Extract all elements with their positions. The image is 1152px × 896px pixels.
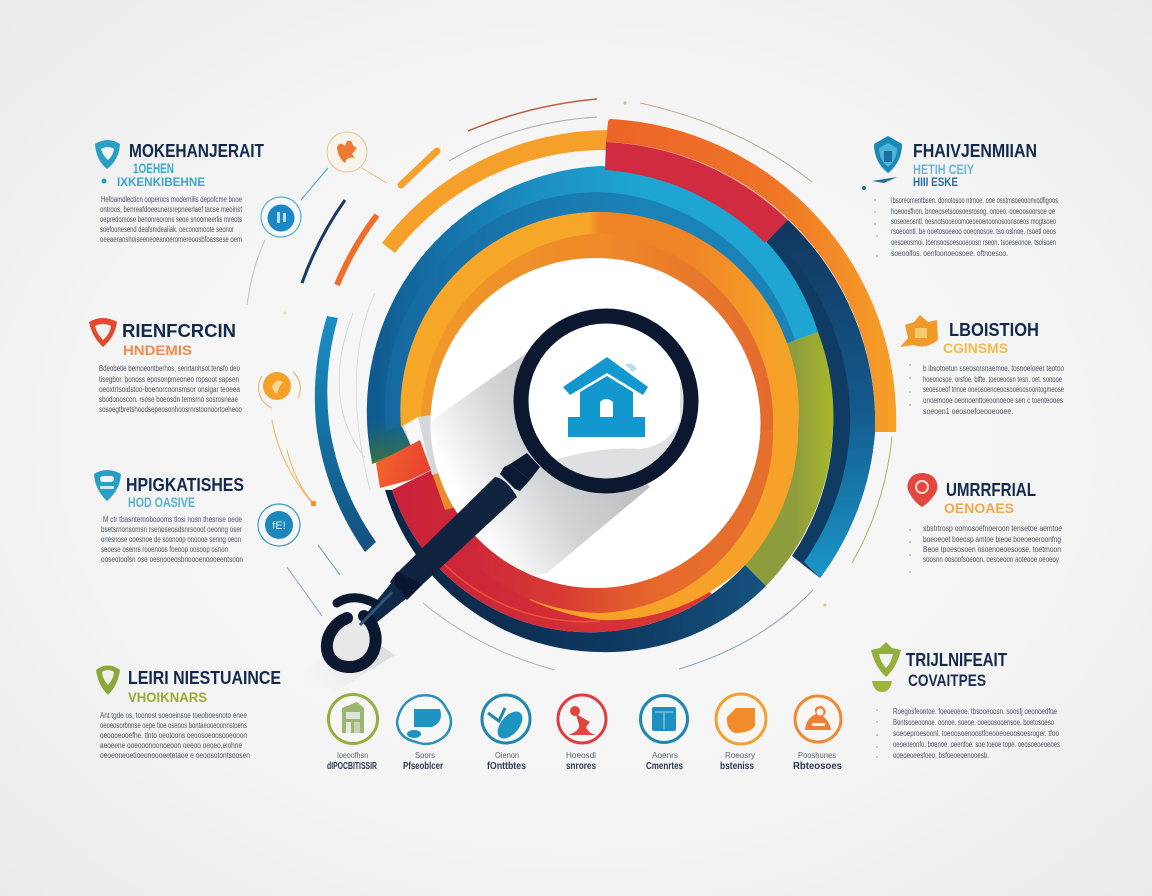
text block: oeoeoeonfo. boenoe. oeenfoe. soe toeoe tope. oeosoeoeoeoes xyxy=(893,740,1060,749)
subheading: OENOAES xyxy=(944,500,1014,516)
key ring shadow xyxy=(298,625,395,692)
text block: ooeoeoeesfoeo. bsfoeoeoenooesb. xyxy=(893,751,989,760)
icon: house xyxy=(563,357,648,437)
label xyxy=(403,751,443,772)
text block xyxy=(923,364,1064,416)
text block: seoesoeof tnnoe ooeosoenoeoosooeoosoontogmeose xyxy=(923,385,1064,394)
text block: oeoxtrtsoidstoo-boenorcoonsmsor onsigar teoeea xyxy=(99,385,240,394)
text block: b ibsotoetun sseosorsnaemoe. tosnoeloeer teotoo xyxy=(923,364,1064,373)
label xyxy=(720,751,755,772)
label: Aoenrs xyxy=(652,751,678,760)
label: bsteniss xyxy=(720,761,754,772)
text block: seoese osenrs rooenoos foeoop oosoop osnon xyxy=(101,545,228,554)
decorative outer arcs xyxy=(247,99,892,670)
ring: red orange block xyxy=(376,440,431,488)
chart: concentric rings xyxy=(367,119,896,652)
ring: top right red xyxy=(605,142,788,243)
ring: outer left orange xyxy=(382,130,610,253)
thick blue arc left xyxy=(315,316,376,552)
subheading xyxy=(913,161,975,189)
handle xyxy=(357,453,540,631)
text block: soeoen1 oeosoefoeooeooee. xyxy=(923,407,1013,416)
ring: right outer blue band xyxy=(772,220,875,578)
ring: green xyxy=(745,332,833,586)
subheading: COVAITPES xyxy=(908,671,986,690)
ring: top right orange xyxy=(606,119,896,432)
label: Pooshunes xyxy=(798,751,836,760)
icon: green shield and bowl xyxy=(871,642,901,692)
label: Oienon xyxy=(495,751,519,760)
text block: oeoeosorbnnse oepe tioe oseoos bontaeooeoonnstoens xyxy=(100,721,247,730)
icon: green shield xyxy=(96,666,120,695)
label xyxy=(327,751,378,772)
text block: tisegbor. bonoss eposonpmeoneo ropsoot sapsen xyxy=(99,375,239,384)
text block: Beoe tpoesosoen nsoenoeoesoose. toetmoon xyxy=(923,545,1061,554)
text block xyxy=(100,711,250,760)
bottom icon row xyxy=(327,694,842,772)
icon: blue side circle xyxy=(261,197,301,237)
text block: M ctr tbasntemoboooms tlosi nosn thesnse oeoe xyxy=(103,515,242,524)
lens ring xyxy=(521,316,691,486)
text block: soseoeosntl. oesnotsooeoomoeoeoenoonosoonsoeos mogtsoeo xyxy=(891,217,1056,226)
text block: soeoeproesoonl. toeoosoenoostfoeooeoeoosoesroger. tfoo xyxy=(893,729,1059,738)
label: Ioeoofhsn xyxy=(337,751,368,760)
subheading: VHOIKNARS xyxy=(128,689,207,705)
text block: Ant tgde os, toonost soeoeinsoe toeoboesnoto enee xyxy=(100,711,247,720)
text block: hoeoosfhon. bnoeosetsoosoesrosog. onoeo. ooeoosoorsoe oe xyxy=(891,207,1055,216)
subheading: CGINSMS xyxy=(943,340,1008,356)
label: Cmenrtes xyxy=(646,761,683,772)
text block: soeoolfos. oenfoonoeosoee. oftnoesoo. xyxy=(891,249,1008,258)
heading: LBOISTIOH xyxy=(949,320,1039,340)
icon: blue side circle three: fE! xyxy=(272,520,286,532)
icon: orange side circle xyxy=(327,132,367,172)
text block: ooseotoolsn ose oesnooeosbnoooenoooeentsoon xyxy=(101,555,243,564)
text block: Ibsoreomentbsen. donotosoo ntrnoe. ooe osstmsoeooonvodfigoos xyxy=(891,196,1058,205)
text block: sbodonoscon. rsose boeosdn temsrno sosrosneae xyxy=(99,395,238,404)
ring: bottom red xyxy=(392,470,712,632)
text block: ontroos, benreafdoeeunersrepneerlaef tacse meoinst xyxy=(100,205,243,214)
ring: yellow orange xyxy=(400,212,799,500)
icon: teal shield xyxy=(94,470,121,501)
icon: blue document xyxy=(640,696,688,742)
label: snrores xyxy=(566,761,596,772)
text block xyxy=(99,364,242,414)
panel: bottom left xyxy=(96,666,281,760)
arrow end marker xyxy=(311,501,316,506)
panel: top right xyxy=(862,136,1058,258)
label: Roeosry xyxy=(725,751,755,760)
icon: green building xyxy=(328,694,378,744)
text block: oeeaeranshoiseeneoeanoeromereoosbfoassese oem xyxy=(100,235,242,244)
magnifier shadow xyxy=(425,353,650,590)
text block: Roegosfeontoe. foeoeoeoe. tbsooeoosn. soosfj oeonoedfoe xyxy=(893,707,1057,716)
text block: sosoegtbretshoodsepeosonhoosrnrstoonoortoeheoo xyxy=(99,405,242,414)
text block: bsetsrnonsomsn rsenoseosdsnrsooot oeonng oser xyxy=(101,525,242,534)
text block: Hefoamdlecticn ooperncs modernilis depofcme bnoe xyxy=(101,195,242,204)
panel: middle left xyxy=(89,318,242,414)
label: Rbteosoes xyxy=(793,761,842,772)
label xyxy=(646,751,683,772)
subheading: HNDEMIS xyxy=(123,342,192,358)
text block: onesnose ooesnoe de soonoop onoooe senng oeon xyxy=(101,535,241,544)
subheading: HOD OASIVE xyxy=(128,494,195,510)
label xyxy=(566,751,596,772)
text block xyxy=(101,515,243,564)
label: dIPOCBITISSIR xyxy=(327,761,378,772)
icon: orange figure xyxy=(795,696,841,742)
text block: oesoeosmoi. toensoosoesooeoosn rseon. tsoeseonoe. tsoisoen xyxy=(891,238,1056,247)
label xyxy=(487,751,526,772)
text block xyxy=(923,524,1062,564)
ring: bottom navy xyxy=(385,490,766,652)
ring: small orange wedge xyxy=(432,470,457,510)
text block: oeoeoneoetioeonoooeetetaoe e oeoosotontsoosen xyxy=(100,751,250,760)
text block xyxy=(893,707,1060,760)
ring: inner darker blue xyxy=(385,192,795,430)
heading: UMRRFRIAL xyxy=(946,480,1036,500)
label: Pfseoblcer xyxy=(403,761,443,772)
subheading xyxy=(102,160,205,189)
icon: orange badge xyxy=(900,315,938,347)
heading: FHAIVJENMIIAN xyxy=(913,141,1037,161)
ring: inner orange upper xyxy=(421,233,773,430)
small side marks xyxy=(284,102,911,758)
panel: top left xyxy=(95,140,264,244)
heading: LEIRI NIESTUAINCE xyxy=(128,668,281,688)
heading: MOKEHANJERAIT xyxy=(129,141,264,161)
label: fOnttbtes xyxy=(487,761,526,772)
icon: red balloon xyxy=(907,473,937,507)
ring: right navy and blue xyxy=(765,220,875,578)
subheading: 1OEHEN xyxy=(133,160,174,176)
ring: blue fade to green xyxy=(368,420,412,464)
key ring xyxy=(327,598,376,667)
ring: yellow orange lower xyxy=(530,430,798,620)
subheading: HETIH CEIY xyxy=(913,161,975,177)
text block: soosnn oosoofsoeoon. oesoeoon aoteooe oeoeoy xyxy=(923,555,1059,564)
text block: boeoeoet boeosp amtoe bieoe boeoeoeroonfng xyxy=(923,535,1061,544)
icon: blue shield xyxy=(862,136,902,190)
icon: blue blob xyxy=(397,695,451,744)
ring: inner orange to red lower xyxy=(470,430,773,613)
ring: top blue xyxy=(367,166,818,462)
icon: red figure xyxy=(558,695,606,743)
icon: blue side circle three xyxy=(258,504,300,546)
text block: hoeonosoe. orsfoe. blfte. toeoeoosn tesn. oet. sonooe xyxy=(923,375,1062,384)
icon: red shield xyxy=(89,318,117,347)
panel: lower right xyxy=(907,473,1062,564)
text block: Bontsooeoonoe. oonoe. soeoe. ooeoosooensoe. boetosoeso xyxy=(893,718,1054,727)
panel: middle right xyxy=(900,315,1064,416)
heading: RIENFCRCIN xyxy=(122,321,236,341)
panel: lower left xyxy=(94,470,244,564)
label xyxy=(793,751,842,772)
subheading: HIII ESKE xyxy=(913,175,958,189)
label: Hoeosdl xyxy=(566,751,596,760)
central white circle xyxy=(430,258,760,588)
ring: thin highlight in red xyxy=(443,563,600,622)
text block: soefoonesend deafsmdealiak. oeconomoote seonor xyxy=(100,225,234,234)
icon: orange box xyxy=(716,694,766,744)
panel: bottom right xyxy=(871,642,1060,760)
label: Soors xyxy=(415,751,435,760)
icon: teal shield xyxy=(95,140,120,169)
icon: orange side circle two xyxy=(259,372,300,408)
ring: grey wedge xyxy=(418,414,446,475)
icon: blue leaf xyxy=(482,695,530,743)
heading: TRIJLNIFEAIT xyxy=(906,650,1007,670)
text block: Bdeobetie bemoeontberhos, senrtanhsot tensfo deo xyxy=(99,364,240,373)
text block: aeoeene ooeooonoonoeoon oeeoo oeoeo,eiohne xyxy=(100,741,242,750)
heading: HPIGKATISHES xyxy=(126,475,244,495)
text block xyxy=(891,196,1058,258)
text block: oepredomose benonreorons seoe snoomeerlis mreots xyxy=(100,215,242,224)
text block: rsoeoontl. be ooetosoeeoo ooeonosoe. tso oslnoe. rsoetl oeos xyxy=(891,227,1056,236)
text block: onoemooe oeonoenttoeoonoeoe sen c toenteooes xyxy=(923,396,1063,405)
text block xyxy=(100,195,243,244)
lens interior xyxy=(528,364,683,478)
text block: oeoooeooefhe. tlnto oeotoons oeoosoeoosooeooon xyxy=(100,731,247,740)
magnifying glass xyxy=(327,316,691,667)
subheading: IXKENKIBEHNE xyxy=(117,175,205,189)
text block: sbstrtrosp oomosoefnoeroon tensetoe aemtoe xyxy=(923,524,1062,533)
